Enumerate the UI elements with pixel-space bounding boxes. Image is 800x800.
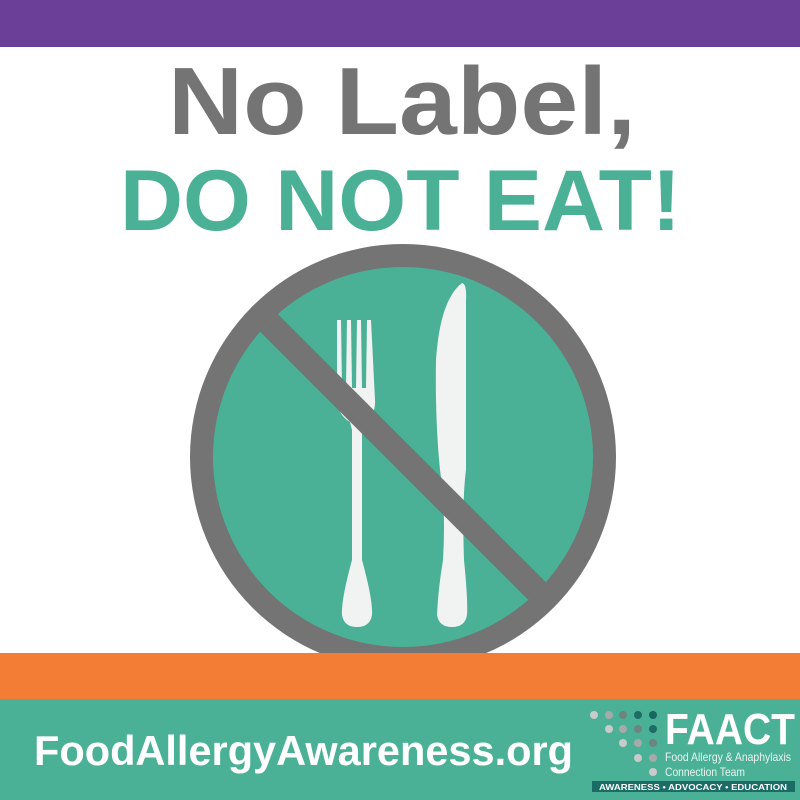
orange band [0, 653, 800, 700]
title: DO NOT EAT: DO NOT EAT! [120, 153, 681, 249]
icon: slash [260, 314, 546, 600]
icon: no eating sign [190, 244, 616, 670]
footer url: FoodAllergyAwareness.org [34, 727, 573, 774]
icon: knife [436, 283, 467, 627]
logo: FAACT: AWARENESS • ADVOCACY • EDUCATION [599, 782, 787, 792]
logo tagline bar [592, 781, 795, 792]
logo: FAACT [590, 705, 795, 792]
footer band [0, 699, 800, 800]
purple top bar [0, 0, 800, 47]
icon: fork [337, 320, 375, 627]
logo dots [590, 711, 657, 776]
logo: FAACT: Connection Team [665, 765, 745, 779]
title: No Label: No Label, [168, 48, 636, 155]
